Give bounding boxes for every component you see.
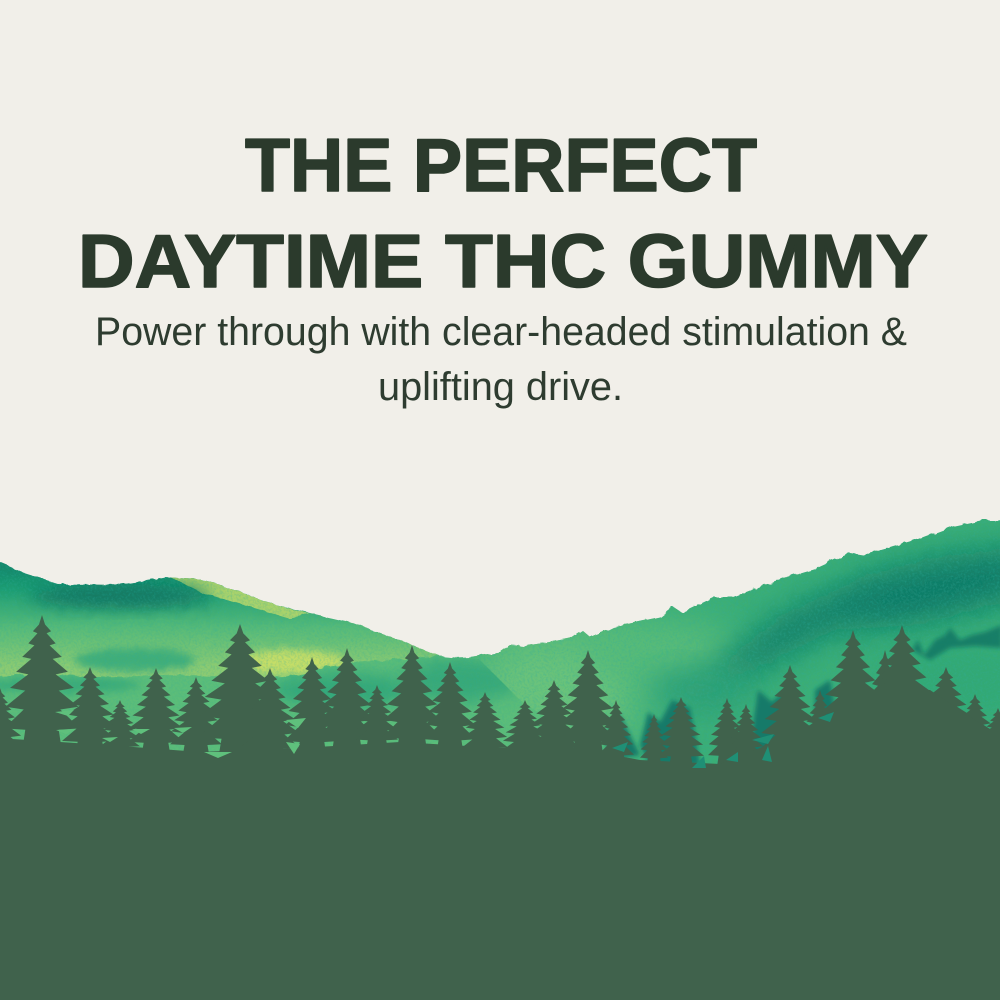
left mountain xyxy=(0,562,440,678)
light slivers between trees xyxy=(55,710,306,758)
dark bleeds on right mountain xyxy=(912,625,1000,660)
title xyxy=(78,123,928,303)
forest mass xyxy=(0,690,1000,1000)
teal slivers between trees xyxy=(612,712,834,768)
subtitle: uplifting drive. xyxy=(378,365,623,409)
tree line xyxy=(0,615,1000,768)
right mountain xyxy=(455,519,1000,764)
title: DAYTIME THC GUMMY xyxy=(78,219,928,303)
subtitle: Power through with clear-headed stimulation & xyxy=(95,310,907,354)
subtitle xyxy=(95,310,907,409)
watercolor mountains xyxy=(0,519,1000,764)
teal runs behind trees xyxy=(605,680,838,768)
title: THE PERFECT xyxy=(245,123,757,207)
front hill xyxy=(0,655,542,752)
